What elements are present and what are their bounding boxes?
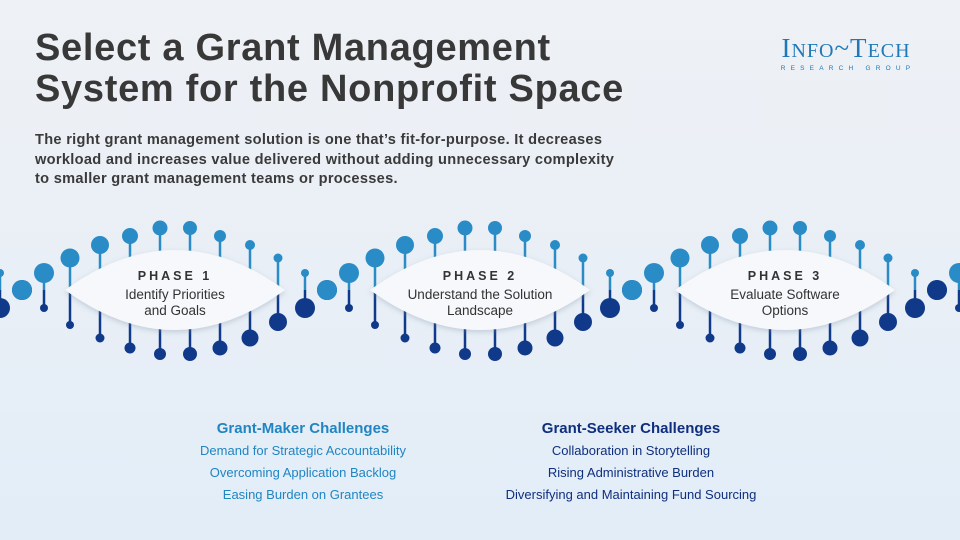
phase 2: Landscape xyxy=(447,303,513,318)
subtitle text: workload and increases value delivered without adding unnecessary complexity xyxy=(35,152,614,168)
subtitle text: to smaller grant management teams or processes. xyxy=(35,171,398,187)
panel: grant-seeker challenges xyxy=(506,420,756,502)
phase 3: Options xyxy=(762,303,809,318)
phase 1 xyxy=(12,220,337,361)
phase 3: Evaluate Software xyxy=(730,287,840,302)
panel: grant-maker challenges: Easing Burden on Grantees xyxy=(223,487,383,502)
title xyxy=(35,27,624,110)
panel: grant-seeker challenges: Collaboration in Storytelling xyxy=(552,443,710,458)
panel: grant-maker challenges xyxy=(200,420,406,502)
panel: grant-seeker challenges: Rising Administrative Burden xyxy=(548,465,714,480)
phase 1: and Goals xyxy=(144,303,206,318)
phase 3 xyxy=(622,220,947,361)
logo: RESEARCH GROUP xyxy=(781,65,915,72)
phase 1: PHASE 1 xyxy=(138,269,212,283)
phase 2: Understand the Solution xyxy=(408,287,552,302)
phase 2 xyxy=(317,220,642,361)
subtitle text xyxy=(35,132,614,187)
panel: grant-maker challenges: Overcoming Application Backlog xyxy=(210,465,396,480)
logo: INFO~TECH xyxy=(781,33,911,63)
phase 1: Identify Priorities xyxy=(125,287,225,302)
title: Select a Grant Management xyxy=(35,27,551,69)
subtitle text: The right grant management solution is one that’s fit-for-purpose. It decreases xyxy=(35,132,602,148)
title: System for the Nonprofit Space xyxy=(35,68,624,110)
panel: grant-seeker challenges: Diversifying and Maintaining Fund Sourcing xyxy=(506,487,756,502)
phase 3: PHASE 3 xyxy=(748,269,822,283)
panel: grant-seeker challenges: Grant-Seeker Challenges xyxy=(542,420,720,437)
panel: grant-maker challenges: Grant-Maker Challenges xyxy=(217,420,389,437)
phase 2: PHASE 2 xyxy=(443,269,517,283)
panel: grant-maker challenges: Demand for Strategic Accountability xyxy=(200,443,406,458)
